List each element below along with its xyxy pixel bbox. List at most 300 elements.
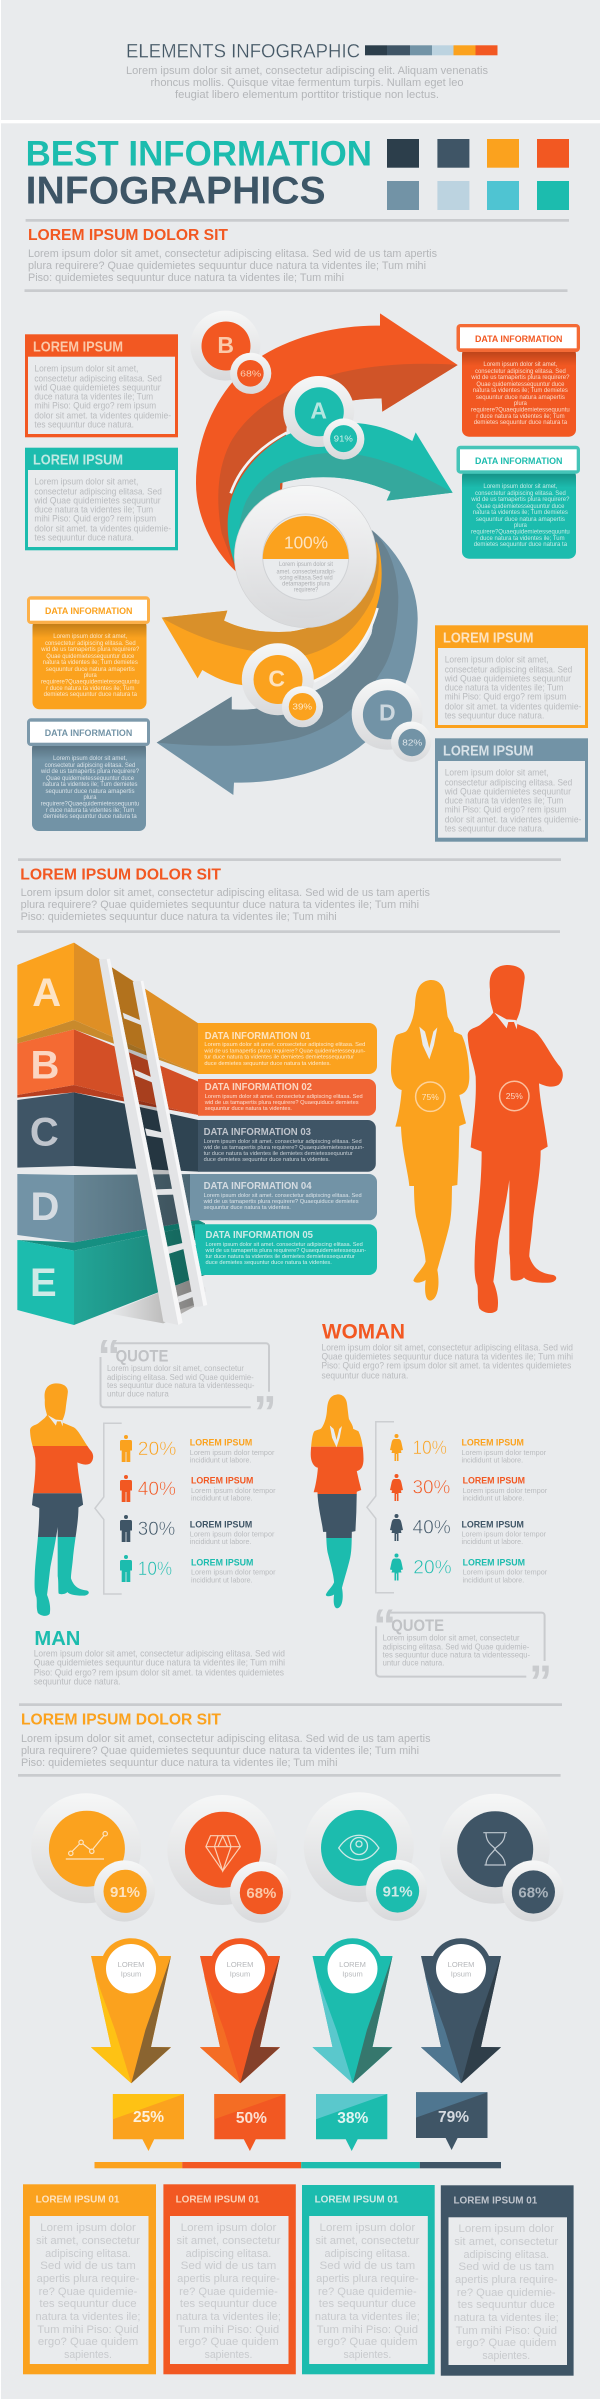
- panel: bottom card teal: LOREM IPSUM 01: [315, 2193, 399, 2205]
- stat row: man 10%: incididunt ut labore.: [191, 1575, 253, 1584]
- panel: lorem ipsum teal: tes sequuntur duce natura.: [34, 532, 134, 542]
- man heading and text: Piso: Quid ergo? rem ipsum dolor sit amet. ta videntes quidemietes: [34, 1667, 285, 1677]
- panel: lorem ipsum orange: duce natura ta videntes ile; Tum: [34, 391, 153, 401]
- info bar 05: wid de us tamapertis plura requirere? Quaequidemietessequun-: [205, 1248, 366, 1254]
- panel: lorem ipsum orange: [25, 334, 178, 437]
- block D: [17, 1174, 198, 1242]
- bracket right: [367, 1422, 394, 1593]
- panel: data information yellow: plura: [84, 672, 97, 679]
- panel: data information slate: Quae quidemietessequuntur duce: [46, 775, 135, 782]
- stat row: woman 20%: Lorem ipsum dolor tempor: [463, 1567, 548, 1576]
- figure: man silhouette 25%: 25%: [506, 1091, 523, 1101]
- panel: data information yellow: Quae quidemietessequuntur duce: [46, 653, 135, 660]
- panel: data information slate: DATA INFORMATION: [45, 728, 133, 738]
- panel: lorem ipsum yellow: LOREM IPSUM: [443, 631, 534, 647]
- info bar 03: DATA INFORMATION 03: [204, 1126, 311, 1138]
- stat row: man 20%: LOREM IPSUM: [190, 1437, 252, 1448]
- stat row: man 30%: 30%: [138, 1518, 175, 1540]
- panel: bottom card red: ergo? Quae quidem: [178, 2336, 279, 2348]
- center circle 100%: [234, 486, 376, 628]
- header title: ELEMENTS INFOGRAPHIC: [126, 40, 360, 62]
- stat row: man 30%: Lorem ipsum dolor tempor: [190, 1529, 275, 1538]
- panel: lorem ipsum slate: wid Quae quidemietes sequuntur: [444, 786, 571, 796]
- arrow: down teal: Ipsum: [342, 1970, 363, 1978]
- info bar 05: Lorem ipsum dolor sit amet. consectetur adipiscing elitasa. Sed: [206, 1242, 363, 1248]
- panel: data information teal: [456, 446, 580, 559]
- panel: bottom card slate: LOREM IPSUM 01: [454, 2194, 537, 2206]
- badge: diamond icon 68%: [167, 1795, 291, 1923]
- panel: bottom card orange: Tum mihi Piso: Quid: [37, 2324, 139, 2336]
- panel: bottom card orange: sapientes.: [64, 2349, 112, 2361]
- stat row: man 10%: [120, 1555, 276, 1584]
- stat row: woman 30%: 30%: [412, 1477, 450, 1499]
- badge: A 91%: 91%: [334, 434, 353, 444]
- arrow: down red: LOREM: [227, 1960, 253, 1969]
- block A: A: [32, 971, 61, 1015]
- arrow: orange: [196, 313, 458, 572]
- header description: rhoncus mollis. Quisque vitae fermentum turpis. Nullam eget leo: [150, 77, 464, 89]
- block A: [17, 943, 198, 1074]
- badge: C 39%: C: [268, 666, 285, 692]
- panel: data information yellow: DATA INFORMATION: [45, 606, 133, 616]
- man heading and text: sequuntur duce natura.: [34, 1677, 121, 1687]
- info bar 02: Lorem ipsum dolor sit amet. consectetur adipiscing elitasa. Sed: [205, 1094, 363, 1100]
- panel: bottom card slate: re? Quae quidemie-: [457, 2287, 556, 2299]
- block E: [17, 1220, 205, 1325]
- info bar 01: Lorem ipsum dolor sit amet. consectetur adipiscing elitasa. Sed: [204, 1042, 365, 1048]
- figure: man segmented: [30, 1383, 94, 1616]
- panel: bottom card teal: adipiscing elitasa.: [325, 2248, 410, 2260]
- panel: data information slate: [27, 718, 150, 831]
- center circle 100%: Lorem ipsum dolor sit: [279, 562, 333, 568]
- main title: [26, 135, 372, 212]
- block C: [17, 1092, 198, 1172]
- main title: INFOGRAPHICS: [26, 169, 326, 212]
- panel: lorem ipsum orange: consectetur adipiscing elitasa. Sed: [34, 373, 162, 383]
- quote box right: ”: [529, 1655, 552, 1707]
- panel: lorem ipsum slate: Lorem ipsum dolor sit amet,: [445, 767, 549, 777]
- panel: bottom card red: LOREM IPSUM 01: [176, 2193, 260, 2205]
- callout 50%: 50%: [236, 2110, 267, 2127]
- arrow: down slate: Ipsum: [451, 1970, 471, 1978]
- panel: bottom card teal: Sed wid de us tam: [320, 2260, 415, 2272]
- panel: bottom card red: tes sequuntur duce: [180, 2298, 277, 2310]
- colour swatches: [387, 139, 569, 210]
- panel: bottom card orange: LOREM IPSUM 01: [36, 2193, 120, 2205]
- stat row: woman 10%: LOREM IPSUM: [462, 1437, 524, 1448]
- info bar 04: wid de us tamapertis plura requirere? Quaequiduce demietes: [203, 1199, 359, 1205]
- badge: C 39%: [242, 643, 323, 727]
- arrow: down orange: LOREM: [118, 1960, 144, 1969]
- ladder ground shadow: [108, 1280, 194, 1323]
- quote box left: ”: [254, 1386, 276, 1438]
- panel: bottom card slate: apertis plura require-: [455, 2274, 558, 2286]
- panel: lorem ipsum teal: Lorem ipsum dolor sit amet,: [34, 476, 138, 486]
- header colour bar: [365, 45, 498, 55]
- ladder: [99, 959, 207, 1325]
- section 1 heading: LOREM IPSUM DOLOR SIT: [28, 227, 228, 244]
- section 3 text: plura requirere? Quae quidemietes sequuntur duce natura ta videntes ile; Tum mihi: [21, 1745, 419, 1757]
- panel: lorem ipsum slate: [435, 738, 588, 842]
- panel: bottom card teal: [302, 2185, 435, 2374]
- panel: lorem ipsum teal: duce natura ta videntes ile; Tum: [34, 504, 153, 514]
- arrow: slate: [157, 530, 418, 795]
- stat row: man 20%: 20%: [138, 1438, 176, 1460]
- panel: lorem ipsum teal: [25, 448, 178, 550]
- badge: hourglass icon 68%: [440, 1794, 564, 1922]
- woman heading and text: sequuntur duce natura.: [322, 1370, 408, 1380]
- block B: B: [31, 1044, 59, 1088]
- panel: data information orange: DATA INFORMATION: [475, 334, 563, 344]
- quote box right: adipiscing elitasa. Sed wid Quae quidemie-: [383, 1642, 530, 1651]
- arrow: down teal: LOREM: [339, 1960, 366, 1969]
- header description: [126, 65, 489, 101]
- section 3 intro: [21, 1711, 431, 1769]
- panel: data information teal: Lorem ipsum dolor sit amet,: [483, 483, 558, 490]
- panel: bottom card slate: Sed wid de us tam: [458, 2261, 554, 2273]
- stat row: woman 10%: Lorem ipsum dolor tempor: [462, 1448, 547, 1457]
- center circle 100%: scing elitasa.Sed wid: [279, 575, 333, 581]
- stat row: woman 30%: Lorem ipsum dolor tempor: [463, 1486, 548, 1495]
- info bar 04: DATA INFORMATION 04: [204, 1180, 312, 1192]
- panel: bottom card orange: tes sequuntur duce: [39, 2298, 137, 2310]
- section 1 text: Piso: quidemietes sequuntur duce natura ta videntes ile; Tum mihi: [28, 272, 344, 284]
- section 3 text: Piso: quidemietes sequuntur duce natura ta videntes ile; Tum mihi: [21, 1757, 338, 1769]
- panel: data information orange: requirere?Quaequidemietessequuntu: [471, 406, 570, 413]
- woman heading and text: Piso: Quid ergo? rem ipsum dolor sit amet. ta videntes quidemietes: [322, 1360, 572, 1370]
- badge: D 82%: 82%: [402, 738, 423, 748]
- quote box left: adipiscing elitasa. Sed wid Quae quidemie-: [107, 1373, 254, 1382]
- stat row: woman 40%: [390, 1514, 547, 1546]
- panel: data information teal: r duce natura ta videntes ile; Tum: [476, 535, 565, 542]
- panel: bottom card orange: Sed wid de us tam: [40, 2260, 136, 2272]
- panel: data information orange: plura: [514, 400, 527, 407]
- info bar 01: wid de us tamapertis plura requirere? Quae quidemietessequun-: [203, 1048, 365, 1054]
- panel: data information orange: consectetur adipiscing elitasa. Sed: [475, 368, 566, 375]
- panel: bottom card slate: Lorem ipsum dolor: [458, 2223, 555, 2235]
- panel: bottom card teal: apertis plura require-: [316, 2273, 419, 2285]
- panel: bottom card teal: sapientes.: [344, 2349, 391, 2361]
- figure: woman silhouette 75%: [391, 980, 469, 1301]
- figure: man silhouette 25%: [468, 965, 563, 1313]
- panel: bottom card red: apertis plura require-: [177, 2273, 280, 2285]
- panel: bottom card slate: adipiscing elitasa.: [463, 2249, 549, 2261]
- stat row: man 10%: 10%: [138, 1558, 172, 1580]
- info bar 01: tur duce natura ta videntes ile demietes demietessequuntur: [204, 1055, 354, 1061]
- panel: lorem ipsum orange: mihi Piso: Quid ergo? rem ipsum: [34, 400, 156, 410]
- info bar 05: duce demietes sequuntur duce natura ta videntes.: [206, 1260, 332, 1266]
- panel: bottom card slate: sapientes.: [482, 2350, 530, 2362]
- panel: bottom card teal: ergo? Quae quidem: [317, 2336, 418, 2348]
- stat row: man 10%: LOREM IPSUM: [191, 1557, 253, 1568]
- panel: lorem ipsum slate: mihi Piso: Quid ergo? rem ipsum: [445, 804, 566, 814]
- center circle 100%: requirere?: [294, 587, 319, 593]
- section 3 text: Lorem ipsum dolor sit amet, consectetur adipiscing elitasa. Sed wid de us tam apertis: [21, 1733, 431, 1745]
- section 1 intro: [28, 227, 438, 284]
- info bar 02: sequuntur duce natura ta videntes.: [205, 1106, 292, 1112]
- panel: lorem ipsum yellow: Lorem ipsum dolor sit amet,: [445, 654, 549, 664]
- woman heading and text: Quae quidemietes sequuntur duce natura ta videntes ile; Tum mihi: [322, 1351, 573, 1361]
- man heading and text: Quae quidemietes sequuntur duce natura ta videntes ile; Tum mihi: [34, 1657, 285, 1667]
- panel: data information yellow: wid de us tamapertis plura requirere?: [40, 646, 140, 653]
- block E: E: [30, 1261, 57, 1305]
- panel: data information teal: DATA INFORMATION: [475, 456, 563, 466]
- panel: data information teal: Quae quidemietessequuntur duce: [476, 503, 565, 510]
- stat row: man 40%: incididunt ut labore.: [191, 1493, 253, 1502]
- panel: lorem ipsum teal: dolor sit amet. ta videntes quidemie-: [34, 523, 171, 533]
- info bar 02: [198, 1079, 376, 1116]
- info bar 01: DATA INFORMATION 01: [205, 1030, 311, 1042]
- icon: eye: [339, 1835, 379, 1860]
- stat row: man 30%: [120, 1515, 275, 1546]
- panel: data information yellow: natura ta videntes ile; Tum demietes: [43, 659, 138, 666]
- panel: lorem ipsum yellow: tes sequuntur duce natura.: [445, 710, 544, 720]
- bracket left: [95, 1423, 122, 1594]
- chart: stacked blocks A-E: [17, 943, 205, 1325]
- panel: bottom card slate: [441, 2185, 574, 2376]
- panel: bottom card red: natura ta videntes ile;: [176, 2311, 281, 2323]
- panel: data information teal: sequuntur duce natura amapertis: [476, 516, 565, 523]
- panel: lorem ipsum orange: Lorem ipsum dolor sit amet,: [34, 363, 138, 373]
- section 2 heading: LOREM IPSUM DOLOR SIT: [20, 866, 221, 883]
- info bar 05: [195, 1224, 377, 1275]
- panel: bottom card slate: Tum mihi Piso: Quid: [456, 2325, 557, 2337]
- panel: bottom card slate: tes sequuntur duce: [458, 2299, 555, 2311]
- header description: feugiat libero elementum porttitor tristique non lectus.: [175, 89, 439, 101]
- stat row: man 20%: Lorem ipsum dolor tempor: [190, 1448, 275, 1457]
- panel: bottom card orange: Lorem ipsum dolor: [40, 2222, 136, 2234]
- stat row: man 40%: [120, 1475, 276, 1502]
- quote box left: QUOTE: [116, 1348, 168, 1366]
- info bar 04: [190, 1174, 377, 1220]
- arrow: down red: [200, 1938, 280, 2083]
- quote box right: “: [373, 1599, 396, 1651]
- stat row: man 20%: [120, 1435, 275, 1464]
- badge: D 82%: [352, 679, 431, 762]
- panel: data information slate: r duce natura ta videntes ile; Tum: [46, 807, 134, 814]
- quote box right: tes sequuntur duce natura ta videntessequ-: [383, 1650, 530, 1659]
- panel: lorem ipsum slate: dolor sit amet. ta videntes quidemie-: [445, 814, 581, 824]
- quote box right: [373, 1599, 552, 1707]
- section 3 text: [21, 1733, 431, 1769]
- panel: data information yellow: requirere?Quaequidemietessequuntu: [41, 678, 140, 685]
- stat row: woman 40%: incididunt ut labore.: [462, 1537, 523, 1546]
- info bar 02: DATA INFORMATION 02: [205, 1081, 312, 1093]
- stat row: man 30%: incididunt ut labore.: [190, 1537, 251, 1546]
- section 2 text: plura requirere? Quae quidemietes sequuntur duce natura ta videntes ile; Tum mihi: [21, 899, 419, 911]
- arrow: down orange: Ipsum: [121, 1970, 141, 1978]
- panel: bottom card orange: sit amet, consectetur: [36, 2235, 140, 2247]
- panel: data information slate: plura: [84, 794, 97, 801]
- woman heading and text: WOMAN: [322, 1320, 405, 1343]
- panel: bottom card orange: [23, 2184, 156, 2374]
- header description: Lorem ipsum dolor sit amet, consectetur adipiscing elit. Aliquam venenatis: [126, 65, 489, 77]
- stat row: woman 30%: incididunt ut labore.: [463, 1493, 524, 1502]
- panel: lorem ipsum slate: duce natura ta videntes ile; Tum: [445, 795, 563, 805]
- arrow: teal: [228, 422, 453, 570]
- figure: woman silhouette 75%: 75%: [422, 1092, 439, 1102]
- man heading and text: [34, 1628, 285, 1687]
- center circle 100%: detamapertis plura: [282, 581, 330, 587]
- section 3 heading: LOREM IPSUM DOLOR SIT: [21, 1711, 221, 1728]
- info bar 01: [198, 1023, 377, 1074]
- info bar 03: duce demietes sequuntur duce natura ta videntes.: [204, 1157, 330, 1163]
- panel: data information slate: wid de us tamapertis plura requirere?: [40, 768, 140, 775]
- stat row: man 40%: LOREM IPSUM: [191, 1475, 253, 1486]
- panel: data information yellow: [27, 596, 150, 709]
- panel: data information orange: natura ta videntes ile; Tum demietes: [473, 387, 568, 394]
- stat row: woman 10%: incididunt ut labore.: [462, 1455, 523, 1464]
- panel: bottom card teal: re? Quae quidemie-: [318, 2286, 417, 2298]
- panel: bottom card orange: ergo? Quae quidem: [38, 2336, 138, 2348]
- callout 25%: 25%: [133, 2109, 164, 2126]
- info bar 01: duce demietes sequuntur duce natura ta videntes.: [204, 1061, 331, 1067]
- panel: lorem ipsum orange: LOREM IPSUM: [33, 340, 123, 356]
- main title: BEST INFORMATION: [26, 135, 372, 174]
- badge: A 91%: A: [310, 398, 327, 424]
- panel: bottom card red: adipiscing elitasa.: [186, 2248, 271, 2260]
- panel: data information orange: Quae quidemietessequuntur duce: [476, 381, 565, 388]
- block C: C: [30, 1111, 59, 1155]
- panel: bottom card red: sapientes.: [205, 2349, 252, 2361]
- quote box right: Lorem ipsum dolor sit amet, consectetur: [383, 1633, 520, 1642]
- info bar 05: DATA INFORMATION 05: [206, 1229, 313, 1241]
- section 2 text: Lorem ipsum dolor sit amet, consectetur adipiscing elitasa. Sed wid de us tam apertis: [21, 887, 431, 899]
- info bar 02: wid de us tamapertis plura requirere? Quaequiduce demietes: [204, 1100, 359, 1106]
- info bar 03: tur duce natura ta videntes ile demietes demietessequuntur: [204, 1151, 353, 1157]
- panel: bottom card red: [163, 2184, 296, 2374]
- woman heading and text: Lorem ipsum dolor sit amet, consectetur adipiscing elitasa. Sed wid: [322, 1342, 573, 1352]
- stat row: woman 40%: 40%: [412, 1517, 451, 1539]
- panel: data information orange: r duce natura ta videntes ile; Tum: [476, 413, 565, 420]
- panel: data information teal: demietes sequuntur duce natura ta: [474, 541, 568, 548]
- panel: bottom card orange: natura ta videntes ile;: [36, 2311, 140, 2323]
- panel: lorem ipsum teal: mihi Piso: Quid ergo? rem ipsum: [34, 513, 156, 523]
- section 1 text: plura requirere? Quae quidemietes sequuntur duce natura ta videntes ile; Tum mihi: [28, 260, 426, 272]
- stat row: woman 20%: incididunt ut labore.: [463, 1575, 524, 1584]
- panel: lorem ipsum slate: tes sequuntur duce natura.: [445, 823, 544, 833]
- quote box left: “: [98, 1330, 120, 1382]
- panel: lorem ipsum orange: dolor sit amet. ta videntes quidemie-: [34, 410, 171, 420]
- stat row: man 10%: Lorem ipsum dolor tempor: [191, 1567, 276, 1576]
- panel: bottom card slate: natura ta videntes ile;: [454, 2312, 559, 2324]
- stat row: man 40%: Lorem ipsum dolor tempor: [191, 1486, 276, 1495]
- stat row: woman 20%: LOREM IPSUM: [463, 1557, 525, 1568]
- panel: data information yellow: consectetur adipiscing elitasa. Sed: [45, 640, 136, 647]
- stat row: man 30%: LOREM IPSUM: [190, 1519, 252, 1530]
- callout 79%: [416, 2092, 488, 2150]
- panel: bottom card teal: sit amet, consectetur: [315, 2235, 420, 2247]
- callout 25%: [113, 2094, 184, 2151]
- badge: B 68%: 68%: [240, 368, 262, 378]
- panel: lorem ipsum slate: LOREM IPSUM: [443, 744, 534, 760]
- arrow: yellow: [162, 542, 382, 687]
- panel: bottom card red: Lorem ipsum dolor: [181, 2222, 277, 2234]
- info bar 03: Lorem ipsum dolor sit amet. consectetur adipiscing elitasa. Sed: [204, 1139, 362, 1145]
- icon: diamond: [206, 1836, 240, 1871]
- panel: data information slate: natura ta videntes ile; Tum demietes: [42, 781, 138, 788]
- panel: lorem ipsum yellow: dolor sit amet. ta videntes quidemie-: [445, 701, 581, 711]
- panel: lorem ipsum orange: tes sequuntur duce natura.: [34, 419, 134, 429]
- arrow: down orange: [91, 1938, 171, 2083]
- woman heading and text: [322, 1320, 573, 1380]
- panel: data information teal: requirere?Quaequidemietessequuntu: [471, 528, 570, 535]
- panel: data information slate: demietes sequuntur duce natura ta: [43, 813, 137, 820]
- panel: data information slate: requirere?Quaequidemietessequuntu: [41, 800, 140, 807]
- stat row: woman 10%: 10%: [412, 1437, 447, 1459]
- callout 50%: [214, 2094, 286, 2151]
- stat row: woman 30%: [390, 1474, 548, 1502]
- panel: bottom card red: Tum mihi Piso: Quid: [178, 2324, 279, 2336]
- panel: bottom card slate: ergo? Quae quidem: [456, 2337, 556, 2349]
- stat row: woman 40%: LOREM IPSUM: [462, 1519, 524, 1530]
- quote box left: [98, 1330, 276, 1438]
- panel: data information yellow: r duce natura ta videntes ile; Tum: [46, 685, 134, 692]
- quote box left: untur duce natura: [107, 1389, 169, 1398]
- panel: data information orange: sequuntur duce natura amapertis: [476, 394, 565, 401]
- center circle 100%: amet. consecteturadipi-: [276, 569, 336, 575]
- panel: lorem ipsum yellow: [435, 625, 588, 728]
- chart: swirl of four arrows: [157, 311, 458, 795]
- panel: data information slate: consectetur adipiscing elitasa. Sed: [45, 762, 136, 769]
- panel: lorem ipsum yellow: mihi Piso: Quid ergo? rem ipsum: [445, 691, 566, 701]
- panel: bottom card orange: re? Quae quidemie-: [39, 2286, 138, 2298]
- panel: data information orange: wid de us tamapertis plura requirere?: [470, 374, 570, 381]
- panel: lorem ipsum yellow: duce natura ta videntes ile; Tum: [445, 682, 563, 692]
- panel: lorem ipsum slate: consectetur adipiscing elitasa. Sed: [445, 777, 572, 787]
- info bar 04: Lorem ipsum dolor sit amet. consectetur adipiscing elitasa. Sed: [204, 1193, 362, 1199]
- badge: D 82%: D: [379, 700, 396, 726]
- panel: bottom card red: sit amet, consectetur: [176, 2235, 281, 2247]
- panel: data information teal: wid de us tamapertis plura requirere?: [470, 496, 570, 503]
- panel: data information orange: [456, 324, 580, 437]
- panel: data information slate: sequuntur duce natura amapertis: [46, 788, 134, 795]
- panel: bottom card red: re? Quae quidemie-: [179, 2286, 278, 2298]
- center circle 100%: 100%: [284, 533, 328, 553]
- panel: lorem ipsum teal: consectetur adipiscing elitasa. Sed: [34, 486, 162, 496]
- section 2 text: Piso: quidemietes sequuntur duce natura ta videntes ile; Tum mihi: [21, 911, 337, 923]
- badge: B 68%: [190, 311, 271, 394]
- block B: [17, 1029, 198, 1115]
- arrow: down red: Ipsum: [230, 1970, 250, 1978]
- panel: data information teal: plura: [514, 522, 527, 529]
- header: elements infographic: [126, 40, 498, 101]
- badge: B 68%: B: [217, 332, 234, 358]
- panel: bottom card teal: natura ta videntes ile;: [315, 2311, 420, 2323]
- section 1 text: Lorem ipsum dolor sit amet, consectetur adipiscing elitasa. Sed wid de us tam apertis: [28, 248, 438, 260]
- panel: bottom card slate: sit amet, consectetur: [454, 2236, 559, 2248]
- badge: chart icon 91%: 91%: [110, 1884, 140, 1901]
- panel: lorem ipsum orange: wid Quae quidemietes sequuntur: [33, 382, 161, 392]
- quote box right: untur duce natura.: [383, 1659, 444, 1668]
- panel: bottom card teal: Lorem ipsum dolor: [320, 2222, 416, 2234]
- info bar 03: [198, 1120, 376, 1172]
- icon: line chart: [66, 1832, 107, 1859]
- panel: bottom card orange: apertis plura require-: [37, 2273, 140, 2285]
- panel: data information yellow: sequuntur duce natura amapertis: [46, 666, 135, 673]
- quote box left: tes sequuntur duce natura ta videntessequ-: [107, 1381, 255, 1390]
- stat row: woman 40%: Lorem ipsum dolor tempor: [462, 1529, 547, 1538]
- stat row: woman 20%: [390, 1554, 548, 1584]
- badge: A 91%: [283, 376, 364, 460]
- panel: bottom card red: Sed wid de us tam: [181, 2260, 276, 2272]
- progress bar: [94, 2162, 501, 2168]
- icon: hourglass: [483, 1833, 507, 1865]
- callout 38%: [316, 2094, 387, 2151]
- panel: data information slate: Lorem ipsum dolor sit amet,: [53, 755, 127, 762]
- section 1 text: [28, 248, 438, 284]
- block D: D: [31, 1185, 59, 1229]
